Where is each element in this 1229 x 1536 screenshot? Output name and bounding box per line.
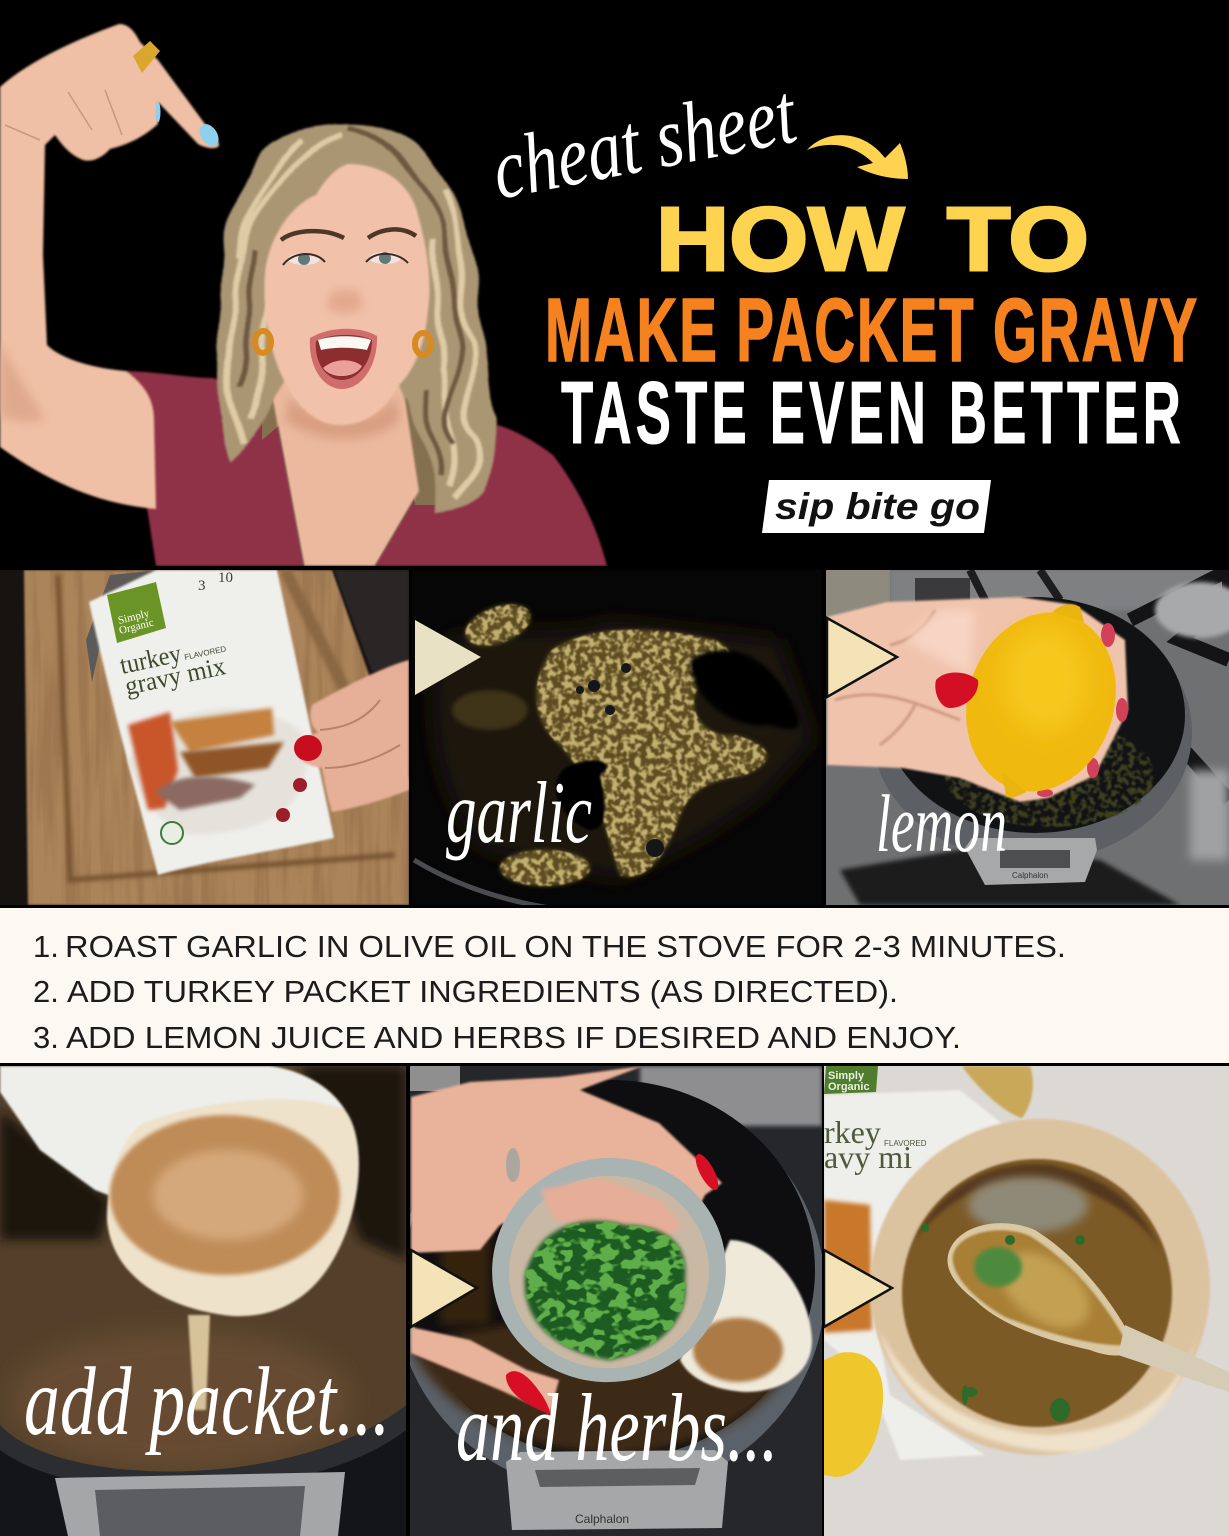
arrow marker <box>411 1250 477 1327</box>
pink nails <box>1101 623 1115 647</box>
neck and chest <box>273 380 419 566</box>
packet text: turkey <box>117 639 184 680</box>
finger highlight <box>905 610 975 675</box>
panel: finished gravy bowl: Organic <box>828 1081 870 1093</box>
stove top <box>890 570 1229 610</box>
panel: finished gravy bowl: avy mi <box>824 1139 912 1175</box>
gravy packet <box>89 570 334 875</box>
pan handle <box>965 838 1097 885</box>
garlic pieces <box>460 596 767 886</box>
label: lemon: lemon <box>876 778 1007 869</box>
burner dark <box>840 850 1180 905</box>
panel: gravy packet on board: gravy mix <box>122 651 228 701</box>
neck shadow <box>285 395 400 439</box>
herbs <box>525 1221 686 1360</box>
panel: gravy packet on board <box>0 570 409 905</box>
tongue <box>323 360 362 376</box>
brows <box>281 231 344 240</box>
pan exterior <box>395 1085 825 1495</box>
gravy in ladle <box>110 1115 340 1275</box>
panel: adding herbs <box>395 1066 825 1536</box>
pan rim <box>0 1405 406 1536</box>
blue nail 2 <box>156 102 160 122</box>
label: and herbs: and herbs... <box>456 1374 778 1481</box>
heading: cheat sheet: cheat sheet <box>484 65 805 218</box>
panel: lemon over pan <box>826 570 1229 905</box>
hand <box>827 597 1128 802</box>
bowl highlight <box>880 1300 1205 1452</box>
face <box>264 164 430 425</box>
packet info: 3 <box>198 578 206 594</box>
granite corner <box>334 570 409 672</box>
cranberries <box>293 778 307 792</box>
step 1: ROAST GARLIC IN OLIVE OIL ON THE STOVE FOR 2-3 MINUTES. <box>65 929 1066 964</box>
panel: finished gravy bowl: Simply <box>828 1070 865 1082</box>
hair <box>218 124 500 513</box>
dress <box>126 371 607 566</box>
gravy <box>411 1315 805 1455</box>
packet background <box>824 1090 1010 1460</box>
ring <box>133 41 160 73</box>
spoon <box>947 1223 1135 1355</box>
title: how to: HOW <box>656 190 904 290</box>
finger creases <box>320 700 400 768</box>
pan handle <box>506 1450 728 1530</box>
glass bowl <box>478 1143 740 1397</box>
herb specks <box>921 1224 1085 1422</box>
title: how to: TO <box>947 190 1089 290</box>
teeth <box>318 336 371 350</box>
panel: lemon over pan: Calphalon <box>1012 871 1048 880</box>
nose <box>326 290 364 314</box>
packet logo: Simply <box>117 607 151 627</box>
step 1: 1. <box>33 929 59 964</box>
soup edge <box>915 1164 1160 1250</box>
panel: gravy packet on board: FLAVORED <box>184 644 227 662</box>
label: add packet: add packet... <box>24 1348 390 1456</box>
board groove <box>58 575 395 880</box>
finger creases <box>5 90 122 140</box>
panel: garlic in pan <box>412 600 822 905</box>
red nail <box>294 735 322 761</box>
food photo <box>128 708 306 835</box>
gravy highlight <box>10 1330 350 1470</box>
arrow marker <box>415 620 481 695</box>
dark oil pools <box>690 650 799 729</box>
packet logo: Organic <box>118 617 155 637</box>
panel: adding herbs: Calphalon <box>575 1512 629 1526</box>
panel: numbered steps <box>0 908 1229 1063</box>
title: how to <box>656 190 1089 290</box>
soup <box>902 1159 1172 1427</box>
gravy left <box>440 1225 490 1325</box>
eyes <box>288 253 320 265</box>
bowl <box>870 1119 1210 1455</box>
herbs on spoon <box>974 1247 1022 1287</box>
hand creases <box>835 610 960 745</box>
packet food <box>824 1200 872 1333</box>
packet logo <box>107 582 166 643</box>
pan contents <box>945 723 1155 827</box>
oil <box>432 620 815 880</box>
knife <box>86 570 160 682</box>
hand <box>298 660 409 812</box>
logo: sip bite go <box>762 480 991 533</box>
arrow marker <box>824 1250 892 1327</box>
hair underlayer <box>262 397 436 505</box>
stove background <box>640 1066 822 1126</box>
blue nail <box>200 124 218 146</box>
packet text: rkey <box>824 1114 881 1150</box>
ladle handle <box>0 1066 345 1205</box>
arrow marker <box>827 618 897 697</box>
hand <box>411 1066 722 1413</box>
granite <box>826 570 890 620</box>
arm and hand <box>0 24 219 509</box>
pan exterior <box>872 602 1192 862</box>
finger through glass <box>540 1178 682 1240</box>
oil bubbles <box>576 663 664 857</box>
packet logo <box>824 1066 878 1094</box>
panel: finished gravy bowl <box>824 1066 1229 1536</box>
step 3: 3. <box>33 1020 59 1055</box>
mouth <box>310 329 377 389</box>
gravy drip <box>188 1315 210 1410</box>
grate right <box>1130 570 1229 800</box>
foam patch <box>968 1177 1088 1233</box>
gold spoon handle <box>962 1066 1033 1118</box>
step 2: ADD TURKEY PACKET INGREDIENTS (AS DIRECTED). <box>67 974 898 1009</box>
arm shadow <box>0 340 45 422</box>
spoon handle <box>1118 1325 1229 1392</box>
pan interior <box>885 597 1185 833</box>
wood grain <box>24 570 409 905</box>
garlic base <box>452 596 767 886</box>
red nails <box>506 1371 550 1415</box>
ladle bowl <box>107 1099 359 1316</box>
ladle in pan <box>680 1240 812 1392</box>
red nail <box>935 672 978 708</box>
step 3: ADD LEMON JUICE AND HERBS IF DESIRED AND ENJOY. <box>66 1020 961 1055</box>
arrow: yellow <box>807 135 908 179</box>
step 2: 2. <box>33 974 59 1009</box>
logo: sip bite go: sip bite go <box>775 486 980 527</box>
dark back of pan <box>0 1066 406 1260</box>
lemon <box>943 593 1139 811</box>
panel: gravy packet on board: 10 <box>218 570 233 586</box>
cutting board <box>24 570 409 905</box>
earrings <box>255 331 271 353</box>
pan handle <box>55 1472 345 1536</box>
ring <box>506 1148 520 1182</box>
organic seal <box>161 822 183 844</box>
panel: ladle pouring gravy <box>0 1066 406 1536</box>
label: garlic: garlic <box>446 765 592 862</box>
lemon wedge <box>824 1352 883 1477</box>
photo: woman pointing up <box>0 24 607 566</box>
pan rim <box>412 858 546 905</box>
pan interior <box>405 1080 815 1460</box>
panel: finished gravy bowl: FLAVORED <box>884 1139 927 1148</box>
